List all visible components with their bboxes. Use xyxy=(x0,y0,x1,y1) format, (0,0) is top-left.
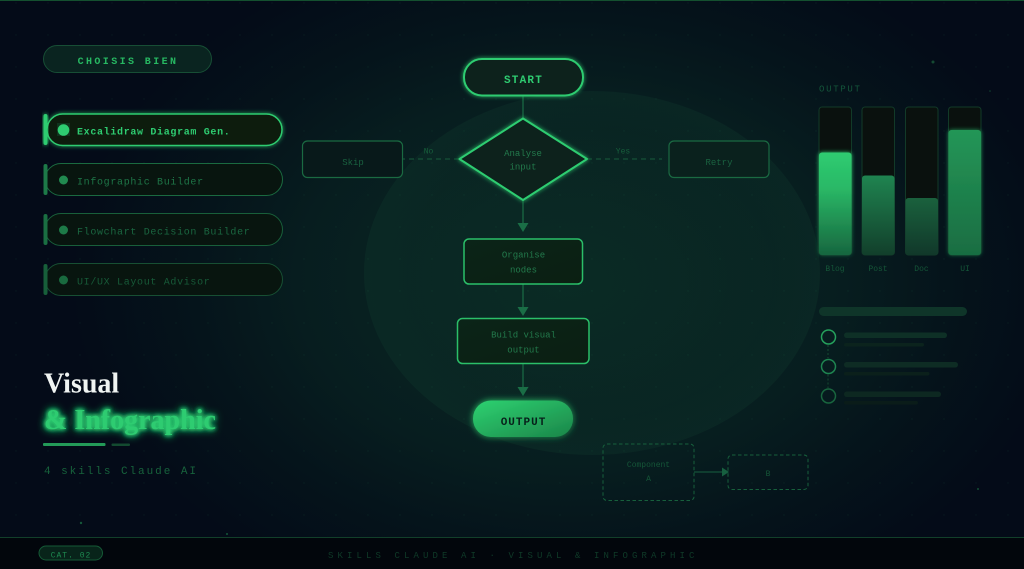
list row 1 xyxy=(822,330,947,346)
node: retry xyxy=(669,141,769,178)
bar: Blog: Blog xyxy=(825,265,845,274)
arrow: build to output xyxy=(518,364,528,396)
bar: Doc: Doc xyxy=(914,265,929,274)
bar: Post xyxy=(862,107,894,274)
badge: choisis bien: CHOISIS BIEN xyxy=(78,57,178,68)
node: organise nodes: Organise xyxy=(502,250,545,260)
list row 3 xyxy=(822,389,941,404)
node: decision xyxy=(460,118,587,200)
panel: skill list xyxy=(44,114,282,296)
component a xyxy=(603,444,694,500)
node: organise nodes: nodes xyxy=(510,266,537,276)
node: build visual output xyxy=(458,318,589,364)
node: build visual output: Build visual xyxy=(491,330,556,340)
footer text: SKILLS CLAUDE AI · VISUAL & INFOGRAPHIC xyxy=(328,551,699,561)
bar: Post: Post xyxy=(868,265,888,274)
title underline xyxy=(43,443,130,446)
node: start: START xyxy=(504,75,543,87)
node: skip xyxy=(302,141,402,178)
skeleton heading bar xyxy=(819,307,967,316)
label: yes: Yes xyxy=(616,148,630,156)
component a: Component xyxy=(627,461,670,470)
component a: A xyxy=(646,475,651,484)
node: retry: Retry xyxy=(705,158,733,168)
skill item: Excalidraw Diagram Gen.: Excalidraw Diagram Gen. xyxy=(77,126,230,138)
title xyxy=(44,368,216,436)
arrow: organise to build xyxy=(518,284,528,316)
skill item: Infographic Builder: Infographic Builder xyxy=(77,176,204,188)
node: output xyxy=(473,400,573,437)
skill item: Flowchart Decision Builder: Flowchart Decision Builder xyxy=(77,226,250,238)
component b: B xyxy=(766,470,771,479)
bar: UI: UI xyxy=(960,265,970,274)
arrow: decision to organise xyxy=(518,200,528,232)
bar: Blog xyxy=(819,107,852,274)
skill item: UI/UX Layout Advisor xyxy=(44,264,282,296)
node: start xyxy=(464,59,583,96)
node: skip: Skip xyxy=(342,158,364,168)
category badge xyxy=(39,546,102,560)
chart heading: OUTPUT xyxy=(819,84,862,94)
category badge: CAT. 02 xyxy=(51,552,91,560)
connector: decision to yes xyxy=(587,158,662,160)
node: build visual output: output xyxy=(507,346,540,356)
timeline connectors xyxy=(827,345,829,388)
label: no: No xyxy=(424,148,433,156)
title: Visual xyxy=(44,368,119,400)
title: & Infographic xyxy=(44,405,216,436)
arrow: component a to b xyxy=(694,468,729,476)
bar: UI xyxy=(948,107,981,274)
connector: decision to no xyxy=(400,158,459,160)
badge: choisis bien xyxy=(44,46,212,72)
list row 2 xyxy=(822,360,958,376)
component b xyxy=(728,455,808,490)
node: decision: Analyse xyxy=(504,149,542,159)
skill item: Flowchart Decision Builder xyxy=(44,214,282,246)
bar chart xyxy=(819,84,981,274)
panel: skeleton list xyxy=(819,307,967,404)
footer xyxy=(0,537,1024,569)
subtitle: 4 skills Claude AI xyxy=(44,466,198,478)
node: organise nodes xyxy=(464,239,582,284)
skill item: UI/UX Layout Advisor: UI/UX Layout Advisor xyxy=(77,276,210,288)
skill item: Excalidraw Diagram Gen. xyxy=(44,114,282,146)
node: decision: input xyxy=(509,162,537,172)
skill item: Infographic Builder xyxy=(44,164,282,196)
connector: start to decision xyxy=(522,96,524,118)
bar: Doc xyxy=(906,107,938,274)
node: output: OUTPUT xyxy=(501,417,546,429)
flowchart xyxy=(302,59,808,500)
